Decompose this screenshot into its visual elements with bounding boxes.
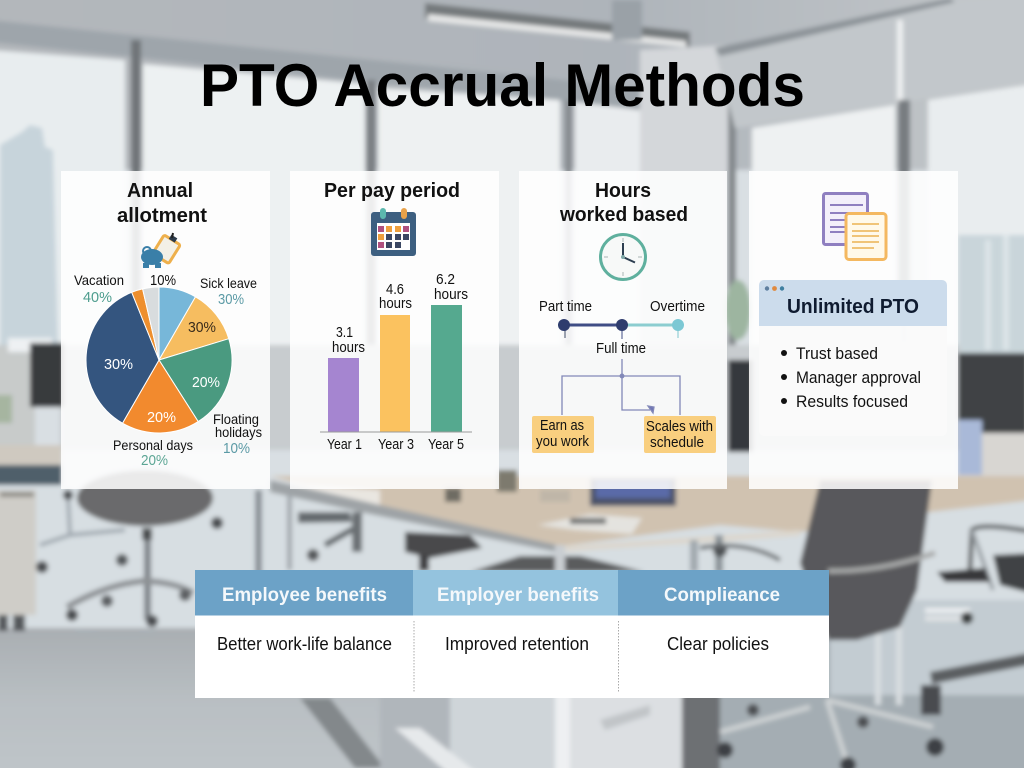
table column: employer benefits: Improved retention	[445, 634, 589, 654]
heading: per pay period: Per pay period	[324, 180, 460, 202]
bullet list: Manager approval	[796, 368, 921, 387]
pie labels: 40%	[83, 289, 112, 306]
callout: scales with schedule: schedule	[650, 434, 704, 451]
pie labels: Vacation	[74, 272, 124, 288]
callout: scales with schedule	[644, 416, 716, 453]
panel: annual allotment	[61, 171, 270, 489]
callout: earn as you work	[532, 416, 594, 453]
benefits table	[195, 570, 829, 698]
callout: earn as you work: you work	[536, 433, 589, 450]
callout: scales with schedule: Scales with	[646, 418, 713, 435]
heading: hours worked based: Hours	[595, 180, 651, 202]
pie labels: Sick leave	[200, 275, 257, 291]
pie labels: 20%	[141, 452, 168, 469]
callout: earn as you work: Earn as	[540, 417, 584, 434]
card: unlimited PTO	[759, 280, 947, 436]
pie labels: 30%	[188, 319, 216, 336]
right chair and floor	[720, 640, 1024, 768]
pie labels: 20%	[147, 409, 176, 426]
panel: per pay period	[290, 171, 499, 489]
bullet list: Trust based	[796, 344, 878, 363]
timeline: part time to overtime: Overtime	[650, 298, 705, 315]
pie chart	[86, 287, 232, 433]
heading: hours worked based: worked based	[559, 204, 688, 226]
icon: calendar	[371, 208, 416, 256]
bullet list: Results focused	[796, 392, 908, 411]
table column: employee benefits	[195, 570, 413, 654]
pie labels: holidays	[215, 424, 262, 440]
icon: clock	[600, 234, 646, 280]
table column: compliance: Complieance	[664, 585, 780, 606]
timeline: part time to overtime: Part time	[539, 298, 592, 315]
panel: hours worked based	[519, 171, 727, 489]
table column: employee benefits: Employee benefits	[222, 585, 387, 606]
table column: employer benefits: Employer benefits	[437, 585, 599, 606]
title: PTO Accrual Methods	[200, 52, 805, 119]
pie labels: 10%	[223, 440, 250, 457]
bottom cabinets	[300, 698, 385, 768]
bar chart: 4.6	[386, 281, 404, 298]
heading: annual allotment	[117, 180, 207, 227]
table column: employer benefits	[413, 570, 618, 654]
heading: annual allotment: Annual	[127, 180, 193, 202]
flow connectors	[562, 359, 680, 415]
bar chart: 3.1	[336, 324, 353, 341]
card: unlimited PTO: Unlimited PTO	[787, 296, 919, 318]
bar chart: hours	[434, 286, 468, 303]
pie labels	[74, 272, 262, 469]
bullet list	[781, 344, 921, 411]
heading: hours worked based	[559, 180, 688, 226]
bar chart: hours	[332, 339, 365, 356]
timeline: part time to overtime	[539, 298, 705, 357]
pie labels: Personal days	[113, 437, 193, 453]
table column: compliance	[618, 570, 829, 654]
bar chart: Year 1	[327, 436, 362, 453]
panel: unlimited PTO	[749, 171, 958, 489]
timeline: part time to overtime: Full time	[596, 340, 646, 357]
bar chart: Year 5	[428, 436, 464, 453]
bar chart: hours	[379, 295, 412, 312]
bar chart	[320, 271, 472, 453]
pie labels: 30%	[218, 291, 244, 308]
pie labels: 10%	[150, 272, 176, 289]
pie labels: 20%	[192, 374, 220, 391]
icon: luggage and clipboard	[141, 232, 182, 268]
floor zones	[0, 485, 1024, 645]
table column: employee benefits: Better work-life balance	[217, 634, 392, 654]
table column: compliance: Clear policies	[667, 634, 769, 654]
bar chart: Year 3	[378, 436, 414, 453]
bar chart: 6.2	[436, 271, 455, 288]
icon: documents	[824, 194, 886, 260]
heading: annual allotment: allotment	[117, 205, 207, 227]
pie labels: Floating	[213, 411, 259, 427]
pie labels: 30%	[104, 356, 133, 373]
